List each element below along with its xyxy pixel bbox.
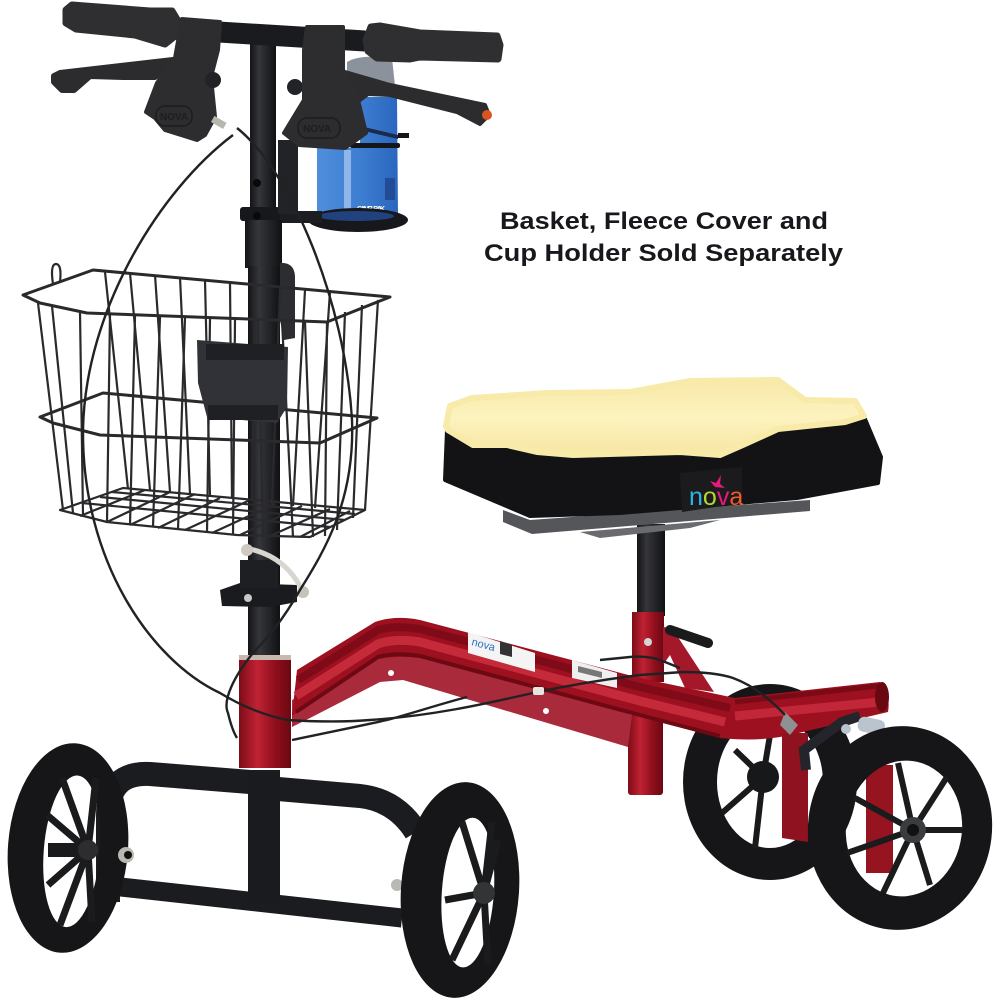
left brake lever and clamp: NOVA (160, 112, 188, 123)
cup holder (278, 208, 408, 232)
caption: sold separately: Cup Holder Sold Separately (484, 240, 844, 267)
bottle: CAMELBAK (357, 206, 385, 213)
height adjustment knob (220, 544, 309, 607)
frame label: nova (470, 636, 497, 654)
rear left wheel (683, 684, 857, 880)
steering column (240, 38, 298, 656)
seat post (637, 524, 665, 616)
seat cushion (445, 380, 881, 516)
seat logo tag: nova (689, 483, 743, 511)
right brake lever and clamp: NOVA (303, 124, 331, 135)
brake cables (83, 116, 785, 740)
caption: sold separately: Basket, Fleece Cover and (500, 208, 828, 235)
seat logo tag (680, 467, 743, 512)
front right wheel (391, 778, 526, 1000)
main red frame tube (292, 618, 889, 739)
seat collar and truss (632, 612, 714, 692)
rear fork and brake bracket (780, 712, 886, 842)
seat plate (503, 500, 810, 538)
rear red fork behind wheel (866, 765, 893, 873)
front left wheel (0, 739, 136, 957)
frame label (468, 632, 617, 688)
right brake lever and clamp (284, 27, 492, 148)
caption: sold separately (484, 208, 844, 267)
handlebar (66, 5, 500, 59)
basket (23, 264, 390, 537)
rear caster post (628, 715, 663, 795)
rear right wheel (796, 716, 1000, 940)
frame hub (239, 655, 291, 768)
lower frame plate (292, 650, 632, 747)
front fork (108, 770, 416, 918)
left brake lever and clamp (54, 19, 221, 140)
bottle (317, 57, 409, 217)
basket mount bracket (197, 340, 288, 423)
